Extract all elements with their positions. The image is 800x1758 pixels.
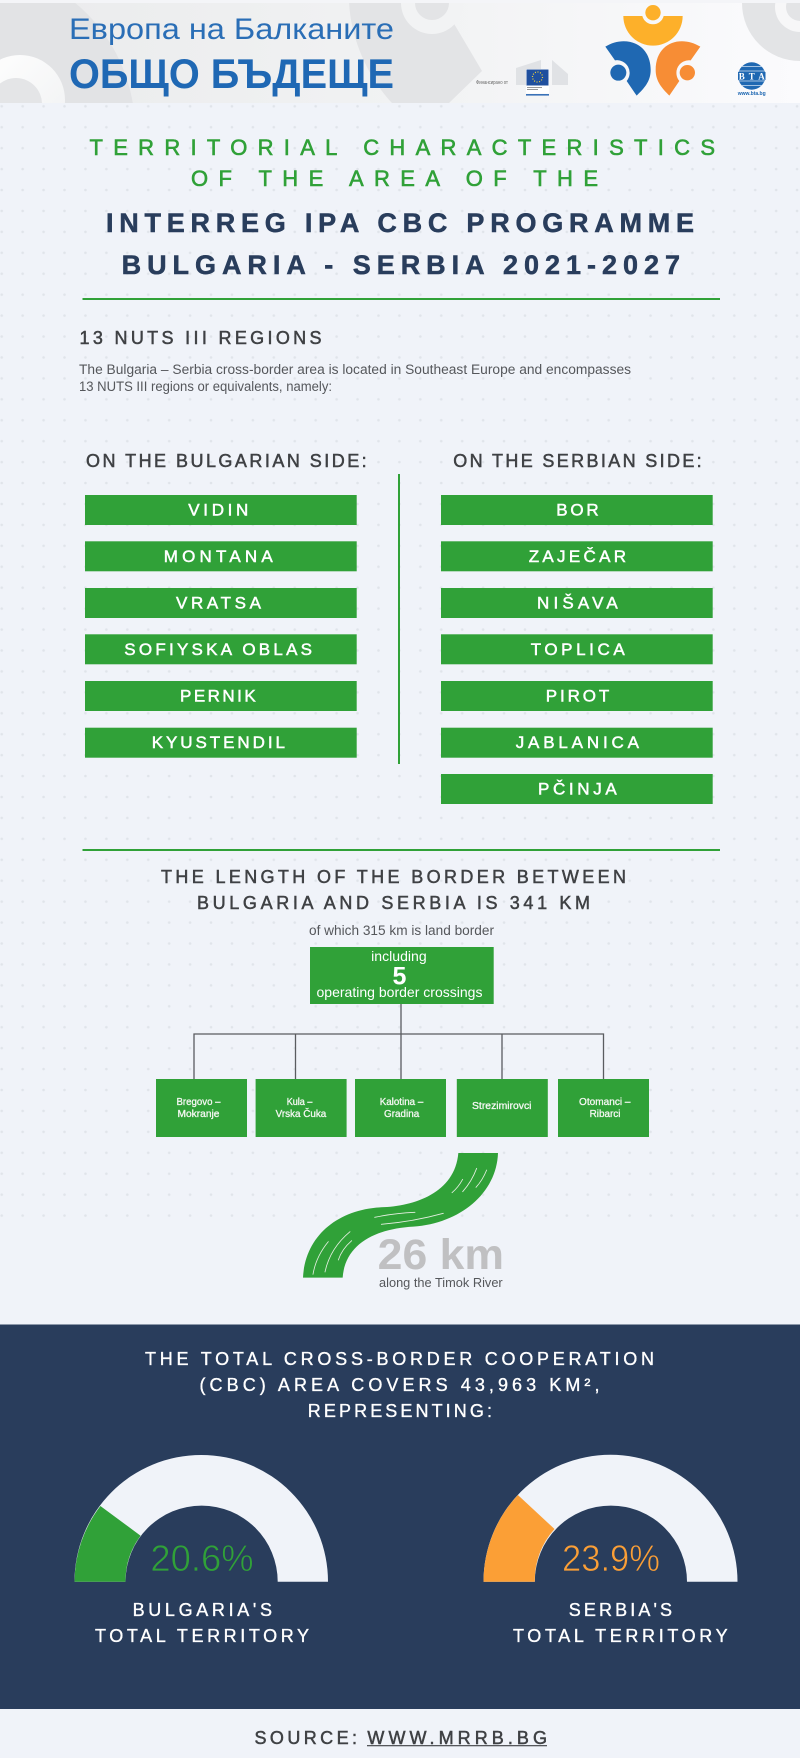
value: 20.6%: 20.6% (150, 1538, 254, 1579)
region: Bor (441, 495, 713, 525)
region: Toplica (441, 634, 713, 664)
heading: length of the border: THE LENGTH OF THE BORDER BETWEEN (161, 867, 626, 887)
section: NUTS III regions (79, 328, 631, 394)
box: 5 operating border crossings: 5 (392, 962, 406, 990)
crossing: Otomanci - Ribarci: Ribarci (590, 1109, 620, 1120)
region: Montana (85, 541, 357, 571)
region: Pirot: PIROT (546, 686, 609, 706)
title line 3: INTERREG IPA CBC PROGRAMME (106, 208, 694, 238)
intro paragraph (79, 362, 631, 394)
crossing: Bregovo - Mokranje (156, 1079, 247, 1137)
heading: total cross-border area: REPRESENTING: (308, 1401, 492, 1421)
gauge: Serbia 23.9% (484, 1455, 738, 1646)
crossing: Kula - Vrska Čuka: Vrska Čuka (276, 1107, 327, 1120)
crossing: Strezimirovci (457, 1079, 548, 1137)
region: Vratsa (85, 588, 357, 618)
crossing: Bregovo - Mokranje: Bregovo – (176, 1097, 221, 1108)
title line 4: BULGARIA - SERBIA 2021-2027 (122, 250, 680, 280)
stat: 26 km: 26 km (378, 1231, 504, 1279)
crossing: Otomanci - Ribarci: Otomanci – (579, 1097, 631, 1108)
heading: length of the border (161, 867, 626, 913)
title line 2: OF THE AREA OF THE (191, 166, 598, 191)
region: Bor: BOR (556, 500, 599, 520)
region: Vidin (85, 495, 357, 525)
funding label: Финансирано от (476, 80, 509, 86)
heading: length of the border: BULGARIA AND SERBIA IS 341 KM (197, 893, 590, 913)
label: Serbia's total territory: TOTAL TERRITORY (513, 1626, 728, 1646)
region: Zaječar (441, 541, 713, 571)
region: Vidin: VIDIN (188, 500, 248, 520)
crossing: Strezimirovci: Strezimirovci (472, 1101, 532, 1112)
header banner (0, 3, 800, 103)
region: Montana: MONTANA (164, 547, 273, 566)
region: Pernik: PERNIK (180, 686, 256, 706)
source line: WWW.MRRB.BG (367, 1728, 547, 1748)
region: Pirot (441, 681, 713, 711)
source line (254, 1728, 547, 1748)
panel: Serbian regions (441, 451, 713, 804)
region: Kyustendil: KYUSTENDIL (152, 733, 285, 752)
region: Nišava: NIŠAVA (537, 594, 618, 612)
crossing: Kalotina - Gradina (355, 1079, 446, 1137)
box: 5 operating border crossings (310, 947, 494, 1004)
icon: BTA globe (737, 62, 766, 97)
region: Pernik (85, 681, 357, 711)
subheading: land border: of which 315 km is land border (309, 923, 495, 938)
heading: 13 NUTS III regions: 13 NUTS III REGIONS (80, 328, 322, 348)
banner title: Европа на Балканите: Европа на Балканите (69, 13, 394, 46)
connector tree (194, 1004, 604, 1079)
heading: on the Bulgarian side: ON THE BULGARIAN SIDE: (86, 451, 367, 471)
panel: total CBC area (0, 1324, 800, 1709)
region: Pčinja: PČINJA (538, 780, 617, 798)
region: Vratsa: VRATSA (176, 594, 262, 612)
title line 1: TERRITORIAL CHARACTERISTICS (90, 135, 715, 160)
label: Serbia's total territory: SERBIA'S (569, 1600, 672, 1620)
region: Zaječar: ZAJEČAR (529, 547, 626, 566)
intro paragraph: The Bulgaria – Serbia cross-border area is located in Southeast Europe and encompasses (79, 362, 631, 377)
source line: SOURCE: (254, 1728, 357, 1748)
region: Kyustendil (85, 728, 357, 758)
crossing: Kula - Vrska Čuka: Kula – (287, 1097, 313, 1108)
main title (90, 135, 715, 280)
region: Sofiyska Oblas: SOFIYSKA OBLAS (124, 640, 312, 659)
icon: BTA globe: www.bta.bg (737, 91, 766, 97)
region: Jablanica (441, 728, 713, 758)
region: Jablanica: JABLANICA (516, 733, 640, 752)
label: Bulgaria's total territory: BULGARIA'S (133, 1600, 272, 1620)
heading: total cross-border area (145, 1349, 654, 1421)
crossing: Kalotina - Gradina: Kalotina – (380, 1097, 424, 1108)
label: Bulgaria's total territory (95, 1600, 309, 1646)
crossing: Bregovo - Mokranje: Mokranje (178, 1109, 220, 1120)
intro paragraph: 13 NUTS III regions or equivalents, namely: (79, 379, 332, 394)
heading: total cross-border area: (CBC) AREA COVERS 43,963 KM², (200, 1375, 600, 1395)
heading: total cross-border area: THE TOTAL CROSS-BORDER COOPERATION (145, 1349, 654, 1369)
crossing: Kalotina - Gradina: Gradina (384, 1109, 420, 1120)
icon: three figures logo (605, 5, 700, 96)
value: 23.9%: 23.9% (562, 1538, 660, 1579)
crossing: Otomanci - Ribarci (558, 1079, 649, 1137)
icon: European Commission logo (516, 60, 568, 96)
crossing: Kula - Vrska Čuka (256, 1079, 347, 1137)
box: 5 operating border crossings: operating border crossings (316, 984, 482, 1000)
region: Pčinja (441, 774, 713, 804)
region: Nišava (441, 588, 713, 618)
icon: Timok river (303, 1153, 498, 1278)
gauge: Bulgaria 20.6% (74, 1455, 328, 1646)
icon: BTA globe: BTA (739, 72, 765, 82)
label: Serbia's total territory (513, 1600, 728, 1646)
panel: Bulgarian regions (85, 451, 367, 758)
banner title: ОБЩО БЪДЕЩЕ: ОБЩО БЪДЕЩЕ (69, 50, 394, 97)
heading: on the Serbian side: ON THE SERBIAN SIDE: (453, 451, 702, 471)
label: Bulgaria's total territory: TOTAL TERRITORY (95, 1626, 309, 1646)
box: 5 operating border crossings: including (371, 948, 427, 964)
region: Sofiyska Oblas (85, 634, 357, 664)
region: Toplica: TOPLICA (531, 640, 625, 659)
caption: along the Timok River: along the Timok River (379, 1275, 503, 1290)
section: border length (156, 867, 649, 1137)
